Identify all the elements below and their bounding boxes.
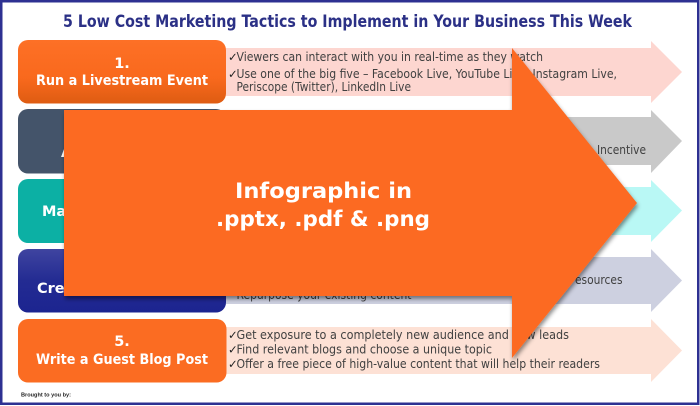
bullets: row 5: ✓ xyxy=(228,357,238,371)
bullets: row 1 xyxy=(228,50,617,94)
bullets: row 5 xyxy=(228,328,600,371)
bullets: row 1: Viewers can interact with you in real-time as they watch xyxy=(236,50,543,64)
arrow: row 3 xyxy=(226,180,682,242)
bullet fragments: row 4: esources xyxy=(575,273,622,287)
overlay caption: .pptx, .pdf & .png xyxy=(216,207,430,232)
bullets: row 1: Use one of the big five – Facebook Live, YouTube Live, Instagram Live, xyxy=(236,67,617,81)
bullets: row 1: ✓ xyxy=(228,67,238,81)
arrow: row 2 xyxy=(226,110,682,173)
bullets: row 5: ✓ xyxy=(228,328,238,342)
heading box: row 3 xyxy=(18,179,226,243)
arrow: row 4 xyxy=(226,249,682,312)
heading box: row 2 xyxy=(18,109,226,174)
bullet fragments: row 4 xyxy=(236,273,622,302)
heading box: row 2: A xyxy=(61,145,73,161)
bullet fragment: row 2: Incentive xyxy=(597,143,646,157)
bullet fragments: row 4: Repurpose your existing content xyxy=(236,288,412,302)
bullets: row 5: Offer a free piece of high-value content that will help their readers xyxy=(236,357,600,371)
heading box: row 4 xyxy=(18,249,226,312)
footer credit: Brought to you by: xyxy=(21,392,71,398)
row 3 xyxy=(18,179,682,243)
heading box: row 5: 5. xyxy=(114,334,130,350)
heading box: row 1: Run a Livestream Event xyxy=(36,73,208,89)
heading box: row 5 xyxy=(18,319,226,382)
row 4 xyxy=(18,249,682,312)
row 2 xyxy=(18,109,682,174)
bullets: row 1: ✓ xyxy=(228,50,238,64)
arrow: row 5 xyxy=(226,319,682,382)
row 1: livestream xyxy=(18,40,682,104)
bullets: row 5: ✓ xyxy=(228,342,238,356)
heading box: row 3: Ma xyxy=(42,204,66,220)
heading box: row 4: Cre xyxy=(37,281,65,297)
heading box: row 1 xyxy=(18,40,226,104)
heading box: row 5: Write a Guest Blog Post xyxy=(36,352,208,368)
arrow: row 1 xyxy=(226,41,682,103)
bullets: row 5: Find relevant blogs and choose a unique topic xyxy=(236,342,492,356)
row 5: guest blog post xyxy=(18,319,682,382)
bullets: row 5: Get exposure to a completely new audience and new leads xyxy=(236,328,569,342)
big overlay arrow xyxy=(64,48,637,358)
overlay caption xyxy=(216,179,430,232)
bullets: row 1: Periscope (Twitter), LinkedIn Live xyxy=(236,80,411,94)
overlay caption: Infographic in xyxy=(235,179,412,204)
heading box: row 1: 1. xyxy=(114,56,130,72)
